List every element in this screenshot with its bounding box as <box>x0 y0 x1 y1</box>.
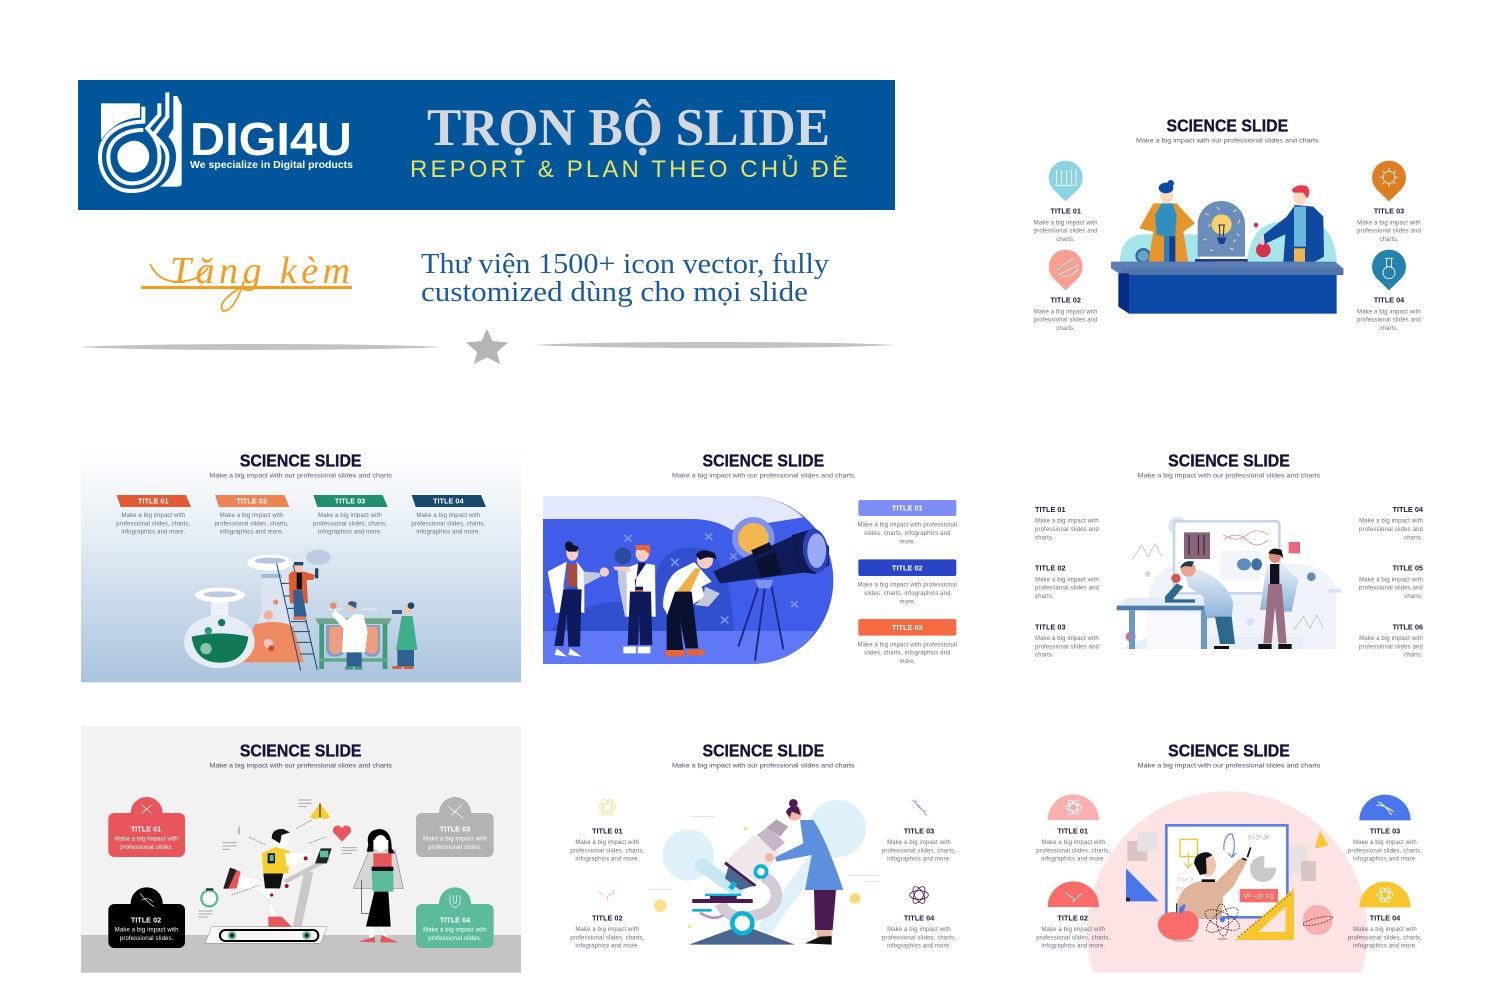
text: item 03: slides, charts, infographics and <box>864 651 951 657</box>
text: item 01: infographics and more. <box>575 857 639 863</box>
card 02: professional slides. <box>120 936 174 942</box>
illustration: teacher at whiteboard: V² −3² =1 <box>1243 891 1274 900</box>
text: item 04: Make a big impact with <box>1357 309 1421 315</box>
text: item 04: professional slides and <box>1357 318 1421 324</box>
text: item 01: TITLE 01 <box>592 826 623 835</box>
text: column 01 <box>116 513 191 536</box>
slide subtitle: Make a big impact with our professional slides and charts <box>1138 762 1321 769</box>
text: column 02 <box>215 513 289 536</box>
slide subtitle: Make a big impact with our professional slides and charts <box>672 473 855 480</box>
text: item 03: charts. <box>1380 237 1399 243</box>
text: column 01: infographics and more. <box>121 530 185 536</box>
icon: pin 04 <box>1372 250 1406 290</box>
text: item 02 <box>858 583 957 605</box>
icon: Digi4U logo mark <box>100 92 182 191</box>
text: item 01: professional slides, charts, <box>570 848 645 854</box>
illustration: treadmill runner and doctor <box>198 800 403 943</box>
text: item 05: TITLE 05 <box>1392 564 1423 573</box>
panel: slide top right <box>1034 116 1421 332</box>
ribbon 04: TITLE 04 <box>433 497 465 506</box>
text: item 02: Make a big impact with <box>1035 577 1099 583</box>
text: item 02: Make a big impact with <box>1034 309 1098 315</box>
text: item 03: infographics and more. <box>1353 857 1417 863</box>
illustration: teacher at whiteboard <box>1126 825 1333 942</box>
text: item 04: TITLE 04 <box>904 914 935 923</box>
text: item 03: TITLE 03 <box>1370 826 1400 835</box>
text: item 06: professional slides and <box>1359 644 1423 650</box>
text: item 01 <box>1035 505 1099 541</box>
text: item 02: Make a big impact with <box>1041 927 1105 933</box>
text: item 02: Make a big impact with professional <box>858 583 957 589</box>
icon: atom yellow <box>599 798 616 817</box>
text: item 01: TITLE 01 <box>1035 505 1066 514</box>
text: item 02: charts. <box>1035 594 1054 600</box>
card 03: TITLE 03 <box>440 825 470 834</box>
text: item 02: professional slides and <box>1035 586 1099 592</box>
slide subtitle: Make a big impact with our professional slides and charts <box>1138 473 1321 480</box>
text: column 04: infographics and more. <box>416 530 480 536</box>
text: item 04: infographics and more. <box>1353 944 1417 950</box>
text: item 03: Make a big impact with <box>1357 220 1421 226</box>
card 02 <box>108 887 185 948</box>
text: item 04: infographics and more. <box>887 944 951 950</box>
pink dome background <box>1087 791 1368 972</box>
text: item 02 <box>1036 914 1111 950</box>
text: item 03: Make a big impact with <box>887 840 951 846</box>
icon: semicircle 03 <box>1359 795 1411 820</box>
text: item 02: TITLE 02 <box>1050 296 1081 305</box>
text: item 01 <box>1036 826 1111 863</box>
gift description: customized dùng cho mọi slide <box>421 276 808 308</box>
slide title: SCIENCE SLIDE <box>702 451 824 471</box>
text: item 04: charts. <box>1380 326 1399 332</box>
text: column 01: professional slides, charts, <box>116 521 191 527</box>
text: column 04: Make a big impact with <box>416 513 480 519</box>
text: item 05: Make a big impact with <box>1359 577 1423 583</box>
text: item 02: professional slides, charts, <box>1036 935 1111 941</box>
text: column 03: Make a big impact with <box>318 513 382 519</box>
text: item 01: Make a big impact with professional <box>858 523 957 529</box>
text: item 05: professional slides and <box>1359 586 1423 592</box>
button: title 01: TITLE 01 <box>892 504 923 513</box>
text: item 01: Make a big impact with <box>1041 840 1105 846</box>
pin glyphs <box>1055 168 1398 279</box>
illustration: teacher at whiteboard: the <box>1175 886 1185 893</box>
text: item 03 <box>1357 207 1421 243</box>
text: item 01: charts. <box>1035 535 1054 541</box>
text: item 04: TITLE 04 <box>1370 914 1401 923</box>
text: item 03: TITLE 03 <box>1374 207 1404 216</box>
text: item 03: professional slides, charts, <box>882 848 956 854</box>
card 01: Make a big impact with <box>115 837 179 843</box>
illustration: teacher at whiteboard: 5=2².3² <box>1248 834 1270 841</box>
illustration: lab scientists <box>1117 517 1341 649</box>
ribbon 02 <box>215 495 289 507</box>
text: item 01: slides, charts, infographics and <box>864 531 951 537</box>
text: item 02: more. <box>899 599 916 605</box>
slide title: SCIENCE SLIDE <box>1168 741 1290 761</box>
button: title 01 <box>858 500 956 516</box>
text: item 05: charts. <box>1404 594 1423 600</box>
text: item 03: charts. <box>1035 653 1054 659</box>
text: item 03 <box>1348 826 1422 863</box>
text: item 01 <box>570 826 645 863</box>
ribbon 02: TITLE 02 <box>236 497 267 506</box>
text: item 04 <box>1348 914 1422 950</box>
panel: slide row 3 left <box>81 726 521 973</box>
text: item 04: professional slides, charts, <box>1348 935 1422 941</box>
text: column 04: professional slides, charts, <box>411 521 486 527</box>
text: item 04: charts. <box>1404 535 1423 541</box>
icon: pin 03 <box>1372 161 1406 201</box>
text: item 03: Make a big impact with professional <box>858 642 957 648</box>
slide background <box>81 445 521 682</box>
text: column 03: infographics and more. <box>318 530 382 536</box>
card 02: TITLE 02 <box>131 916 161 925</box>
floor band <box>81 935 521 973</box>
panel: slide row 3 middle <box>570 741 956 950</box>
slide background <box>81 726 521 973</box>
text: item 01: TITLE 01 <box>1057 826 1088 835</box>
text: item 01: more. <box>899 539 916 545</box>
banner subtitle: REPORT & PLAN THEO CHỦ ĐỀ <box>410 154 848 183</box>
card 03 <box>416 797 494 857</box>
panel: slide row 2 middle <box>543 451 957 665</box>
banner title: TRỌN BỘ SLIDE <box>427 99 830 157</box>
text: item 04: Make a big impact with <box>1359 519 1423 525</box>
button: title 02: TITLE 02 <box>892 563 923 572</box>
illustration: teacher at whiteboard: The X <box>1177 877 1195 884</box>
illustration: flasks and scientists <box>184 550 417 671</box>
slide subtitle: Make a big impact with our professional slides and charts <box>1136 138 1319 145</box>
slide title: SCIENCE SLIDE <box>240 740 361 760</box>
divider with star <box>79 329 895 364</box>
slide subtitle: Make a big impact with our professional slides and charts <box>672 762 855 769</box>
logo tagline: We specialize in Digital products <box>190 159 353 171</box>
text: item 05 <box>1359 564 1423 600</box>
text: item 01: Make a big impact with <box>575 840 639 846</box>
text: item 02: TITLE 02 <box>1035 564 1066 573</box>
text: item 01 <box>1034 207 1098 243</box>
card 04: TITLE 04 <box>440 916 471 925</box>
text: item 02: infographics and more. <box>575 944 639 950</box>
slide title: SCIENCE SLIDE <box>1166 116 1288 136</box>
text: item 02: professional slides and <box>1034 318 1098 324</box>
text: item 02: TITLE 02 <box>592 914 623 923</box>
text: item 01: Make a big impact with <box>1035 519 1099 525</box>
icon: star <box>466 329 508 364</box>
card 04 <box>416 887 494 948</box>
text: column 03 <box>313 513 387 536</box>
button: title 03: TITLE 03 <box>892 623 923 632</box>
button: title 02 <box>858 559 956 576</box>
text: item 03: professional slides, charts, <box>1348 848 1422 854</box>
text: column 02: professional slides, charts, <box>215 521 289 527</box>
card 04: professional slides. <box>428 936 482 942</box>
text: item 03 <box>882 826 956 863</box>
text: item 03: professional slides and <box>1035 644 1099 650</box>
text: item 04: TITLE 04 <box>1374 296 1405 305</box>
logo wordmark: DIGI4U <box>190 113 352 165</box>
slide subtitle: Make a big impact with our professional slides and charts <box>209 762 393 769</box>
slide subtitle: Make a big impact with our professional slides and charts <box>209 473 393 480</box>
gift description: Thư viện 1500+ icon vector, fully <box>421 248 830 280</box>
text: item 06 <box>1359 622 1423 659</box>
icon: semicircle 01 <box>1048 794 1099 820</box>
ribbon 01: TITLE 01 <box>138 497 169 506</box>
gift description <box>421 248 830 308</box>
text: item 06: TITLE 06 <box>1392 622 1423 631</box>
gift label: Tặng kèm <box>141 250 352 311</box>
text: item 01 <box>858 523 957 545</box>
text: item 04: TITLE 04 <box>1392 505 1424 514</box>
card 02: Make a big impact with <box>115 928 179 934</box>
card 01: TITLE 01 <box>131 825 161 834</box>
text: item 01: Make a big impact with <box>1034 220 1098 226</box>
ribbon 04 <box>412 495 486 507</box>
text: item 02: charts. <box>1056 326 1075 332</box>
text: item 03: Make a big impact with <box>1353 840 1417 846</box>
text: item 04 <box>882 914 956 950</box>
text: item 03: infographics and more. <box>887 857 951 863</box>
text: column 02: Make a big impact with <box>220 513 284 519</box>
text: item 02: infographics and more. <box>1041 944 1105 950</box>
text: column 04 <box>411 513 486 536</box>
slide title: SCIENCE SLIDE <box>702 741 824 761</box>
panel: slide row 2 right <box>1035 451 1424 659</box>
text: item 04: professional slides and <box>1359 527 1423 533</box>
text: item 03 <box>1035 622 1099 659</box>
text: item 06: charts. <box>1404 653 1423 659</box>
card 03: Make a big impact with <box>423 837 487 843</box>
text: item 03: TITLE 03 <box>904 826 934 835</box>
text: column 03: professional slides, charts, <box>313 521 387 527</box>
icon: dna blue <box>912 799 927 816</box>
text: item 03: TITLE 03 <box>1035 622 1066 631</box>
text: item 03: Make a big impact with <box>1035 636 1099 642</box>
text: item 03: more. <box>899 659 916 665</box>
text: item 01: charts. <box>1056 237 1075 243</box>
illustration: telescope scene <box>543 496 833 664</box>
panel: slide row 3 right <box>1036 741 1422 972</box>
panel: slide row 2 left <box>81 445 521 682</box>
icon: atom purple <box>910 885 928 905</box>
card 01: professional slides. <box>120 845 174 851</box>
text: item 02 <box>1035 564 1099 600</box>
ribbon 03 <box>313 495 388 507</box>
text: item 01: professional slides and <box>1034 229 1098 235</box>
text: item 02: TITLE 02 <box>1057 914 1088 923</box>
text: item 06: Make a big impact with <box>1359 636 1423 642</box>
text: item 04 <box>1359 505 1424 541</box>
text: item 04: Make a big impact with <box>887 927 951 933</box>
card 03: professional slides. <box>428 845 482 851</box>
ribbon 01 <box>117 495 191 507</box>
gift label: Tặng kèm: Tặng kèm <box>170 250 350 292</box>
button: title 03 <box>858 619 956 636</box>
text: item 04 <box>1357 296 1421 332</box>
text: item 02 <box>1034 296 1098 332</box>
text: item 04: Make a big impact with <box>1353 927 1417 933</box>
text: item 01: professional slides, charts, <box>1036 848 1111 854</box>
text: item 01: infographics and more. <box>1041 857 1105 863</box>
text: item 02: Make a big impact with <box>575 927 639 933</box>
icon: semicircle 02 <box>1048 881 1099 907</box>
icon: pin 01 <box>1049 161 1083 201</box>
text: item 02 <box>570 914 645 950</box>
text: item 04: professional slides, charts, <box>882 935 956 941</box>
card 04: Make a big impact with <box>423 928 487 934</box>
ribbon 03: TITLE 03 <box>335 497 365 506</box>
slide title: SCIENCE SLIDE <box>240 451 361 471</box>
illustration: scientists at lab bench <box>1111 180 1343 314</box>
icon: pin 02 <box>1049 250 1083 290</box>
header banner <box>78 80 895 210</box>
text: item 02: professional slides, charts, <box>570 935 645 941</box>
card 01 <box>108 797 185 857</box>
text: item 01: professional slides and <box>1035 527 1099 533</box>
text: item 03: professional slides and <box>1357 229 1421 235</box>
text: item 02: slides, charts, infographics and <box>864 591 951 597</box>
text: item 03 <box>858 642 957 665</box>
text: column 01: Make a big impact with <box>121 513 185 519</box>
slide title: SCIENCE SLIDE <box>1168 451 1290 471</box>
text: item 01: TITLE 01 <box>1050 207 1081 216</box>
icon: molecule pink <box>598 890 613 901</box>
illustration: microscope and researcher <box>648 799 880 945</box>
text: column 02: infographics and more. <box>220 530 284 536</box>
icon: semicircle 04 <box>1359 882 1411 907</box>
